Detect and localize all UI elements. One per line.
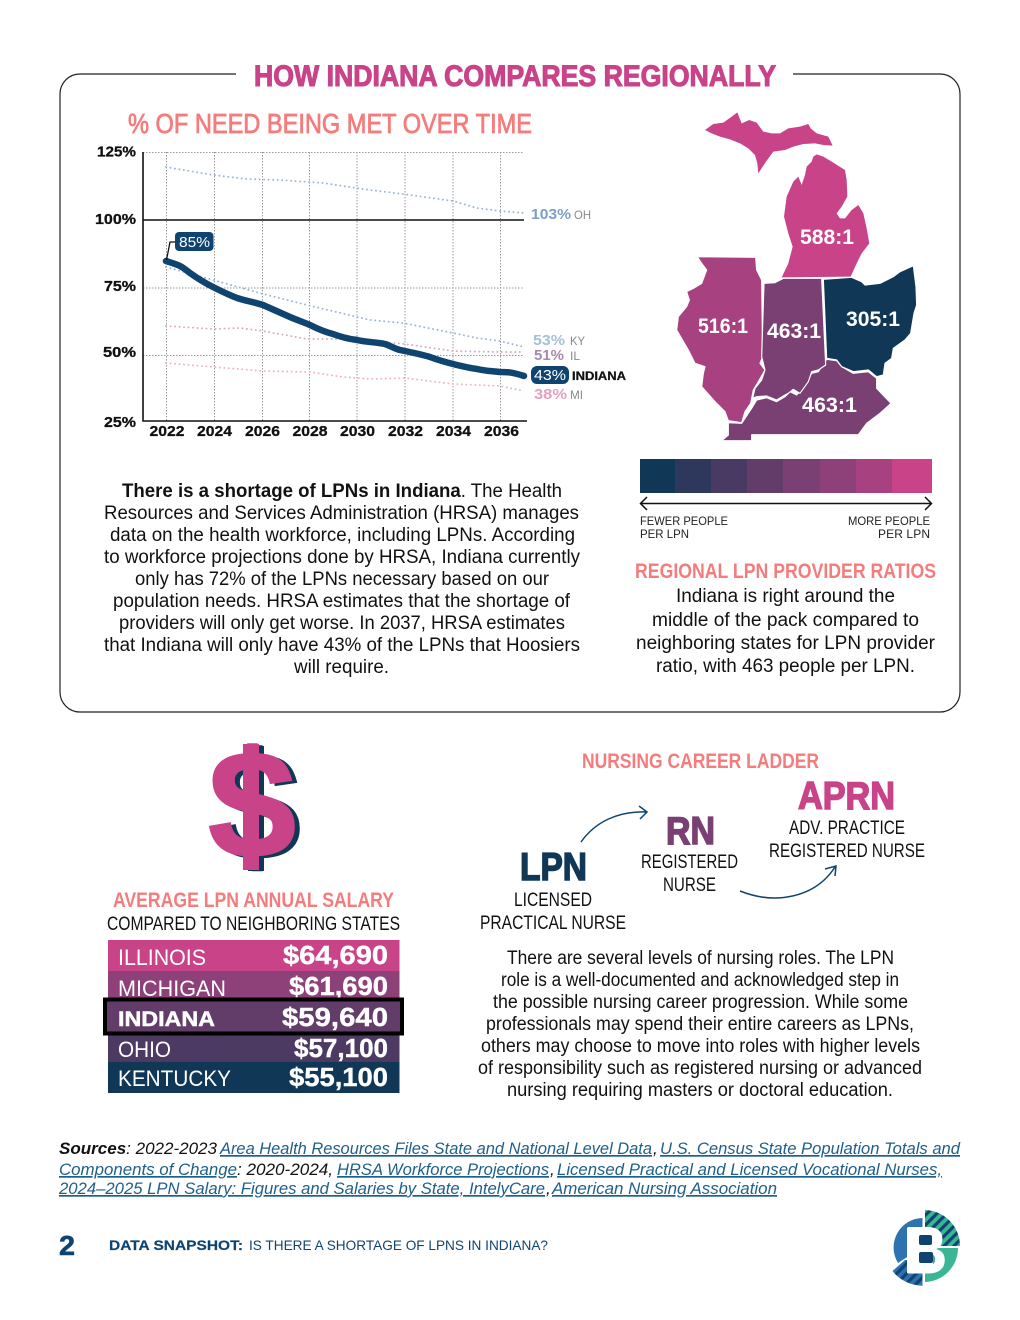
label: Indiana 43 percent: 43%: [534, 368, 566, 384]
y axis labels: 125%: [97, 144, 136, 160]
label: Kentucky 53 percent: KY: [570, 334, 585, 348]
value: Indiana ratio: 463:1: [767, 320, 821, 343]
sources: ,: [653, 1139, 658, 1158]
career step: LPN: PRACTICAL NURSE: [480, 913, 626, 934]
state: Kentucky: [722, 359, 891, 441]
row: Michigan: MICHIGAN: [118, 976, 226, 1001]
text block: LPN shortage explanation: population needs. HRSA estimates that the shortage of: [113, 591, 571, 612]
text block: LPN shortage explanation: that Indiana will only have 43% of the LPNs that Hoosiers: [104, 635, 580, 656]
career step: RN: RN: [666, 810, 715, 853]
x axis labels: 2022: [150, 423, 184, 440]
x axis labels: 2034: [436, 423, 472, 440]
text block: nursing roles: others may choose to move into roles with higher levels: [481, 1036, 920, 1057]
callout: 85 percent: 85%: [179, 235, 210, 251]
sources: U.S. Census State Population Totals and: [660, 1139, 961, 1158]
text block: regional ratios: ratio, with 463 people per LPN.: [656, 656, 915, 677]
career step: LPN: LPN: [520, 846, 587, 889]
row: Illinois: $64,690: [283, 940, 388, 970]
footer title: IS THERE A SHORTAGE OF LPNS IN INDIANA?: [249, 1237, 548, 1253]
sources: [58, 1139, 961, 1198]
series: Kentucky: [166, 267, 524, 347]
label: Ohio 103 percent: [531, 206, 591, 223]
state: Indiana: [753, 278, 826, 400]
career step: APRN: [769, 775, 925, 862]
y axis labels: 100%: [95, 211, 136, 228]
text block: LPN shortage explanation: [104, 481, 580, 678]
row: Kentucky: KENTUCKY: [118, 1066, 231, 1091]
label: Kentucky 53 percent: 53%: [533, 332, 565, 349]
label: Kentucky 53 percent: [533, 332, 585, 349]
logo: [892, 1210, 960, 1287]
y axis labels: 50%: [103, 344, 136, 361]
footer title: DATA SNAPSHOT:: [109, 1237, 243, 1253]
row: Kentucky: $55,100: [289, 1062, 388, 1092]
heading: nursing career ladder: NURSING CAREER LADDER: [582, 750, 819, 773]
series: Illinois: [166, 326, 524, 352]
legend label: fewer people: PER LPN: [640, 527, 689, 541]
legend label: fewer people: [640, 514, 728, 541]
row: Michigan: [108, 971, 400, 1001]
y axis labels: 75%: [104, 278, 136, 295]
series: Ohio: [166, 167, 524, 213]
arrow: RN to APRN: [740, 866, 836, 898]
sources: Components of Change: [59, 1160, 237, 1179]
x axis labels: 2032: [388, 423, 423, 440]
text block: LPN shortage explanation: There is a shortage of LPNs in Indiana. The Health: [122, 481, 562, 502]
career step: APRN: REGISTERED NURSE: [769, 841, 925, 862]
sources: ,: [546, 1179, 551, 1198]
y axis labels: 25%: [104, 414, 136, 431]
label: Michigan 38 percent: [534, 386, 583, 403]
table: salaries by state: [105, 940, 402, 1093]
career step: APRN: APRN: [798, 775, 895, 818]
label: Ohio 103 percent: 103%: [531, 206, 571, 223]
legend label: fewer people: FEWER PEOPLE: [640, 514, 728, 528]
row: Ohio: $57,100: [294, 1033, 388, 1063]
label: Michigan 38 percent: MI: [570, 388, 583, 402]
sources: 2024–2025 LPN Salary: Figures and Salaries by State, IntelyCare: [58, 1179, 545, 1198]
sources: : 2020-2024,: [237, 1160, 333, 1179]
x axis labels: 2026: [245, 423, 280, 440]
title: HOW INDIANA COMPARES REGIONALLY: [254, 60, 776, 93]
value: Ohio ratio: 305:1: [846, 308, 900, 331]
text block: regional ratios: neighboring states for LPN provider: [636, 633, 936, 654]
row: Indiana highlighted: [105, 1000, 402, 1034]
text block: LPN shortage explanation: will require.: [293, 657, 389, 678]
career step: RN: NURSE: [663, 875, 716, 896]
career step: RN: [641, 810, 738, 896]
career step: LPN: [480, 846, 626, 934]
row: Indiana highlighted: INDIANA: [118, 1008, 215, 1031]
x axis labels: [150, 423, 519, 440]
value: Michigan ratio: 588:1: [800, 226, 854, 249]
x axis labels: 2030: [340, 423, 375, 440]
callout: 85 percent: [166, 232, 214, 260]
sources: Licensed Practical and Licensed Vocational Nurses,: [557, 1160, 942, 1179]
line chart: percent of need over time: [95, 144, 626, 440]
arrow: scale direction: [640, 497, 932, 510]
row: Indiana highlighted: $59,640: [282, 1002, 388, 1032]
heading: average LPN annual salary: AVERAGE LPN ANNUAL SALARY: [113, 889, 394, 912]
career step: APRN: ADV. PRACTICE: [789, 818, 905, 839]
label: Illinois 51 percent: IL: [570, 349, 580, 363]
text block: nursing roles: nursing requiring masters or doctoral education.: [507, 1080, 893, 1101]
legend label: more people: [848, 514, 930, 541]
label: Ohio 103 percent: OH: [574, 208, 591, 222]
row: Ohio: OHIO: [118, 1037, 171, 1062]
label: Indiana 43 percent: [531, 366, 626, 384]
legend: colour scale: [640, 459, 932, 541]
text block: LPN shortage explanation: providers will only get worse. In 2037, HRSA estimates: [119, 613, 565, 634]
row: Michigan: $61,690: [289, 971, 388, 1001]
logo: B: [904, 1213, 947, 1287]
text block: LPN shortage explanation: only has 72% of the LPNs necessary based on our: [135, 569, 550, 590]
map: regional LPN provider ratios: [677, 112, 917, 441]
value: Kentucky ratio: 463:1: [802, 394, 857, 417]
career step: RN: REGISTERED: [641, 852, 738, 873]
text block: nursing roles: [478, 948, 922, 1101]
label: Illinois 51 percent: [534, 347, 580, 364]
icon: dollar sign: $: [213, 722, 301, 892]
row: Ohio: [108, 1032, 400, 1063]
heading: percent of need being met: % OF NEED BEING MET OVER TIME: [128, 108, 532, 139]
series: Indiana: [166, 261, 524, 376]
state: Ohio: [823, 266, 917, 377]
x axis labels: 2024: [197, 423, 233, 440]
arrow: LPN to RN: [581, 806, 647, 842]
sources: American Nursing Association: [551, 1179, 777, 1198]
footer title: [109, 1237, 548, 1253]
career step: LPN: LICENSED: [514, 890, 592, 911]
sources: Area Health Resources Files State and National Level Data: [219, 1139, 652, 1158]
text block: nursing roles: the possible nursing career progression. While some: [493, 992, 908, 1013]
text block: LPN shortage explanation: data on the health workforce, including LPNs. According: [110, 525, 575, 546]
subheading: compared to neighboring states: COMPARED TO NEIGHBORING STATES: [107, 914, 400, 935]
legend label: more people: PER LPN: [878, 527, 930, 541]
row: Illinois: ILLINOIS: [118, 945, 206, 970]
text block: LPN shortage explanation: Resources and Services Administration (HRSA) manages: [104, 503, 579, 524]
text block: nursing roles: of responsibility such as registered nursing or advanced: [478, 1058, 922, 1079]
text block: LPN shortage explanation: to workforce projections done by HRSA, Indiana currently: [104, 547, 580, 568]
label: Michigan 38 percent: 38%: [534, 386, 567, 403]
label: Indiana 43 percent: INDIANA: [572, 371, 626, 383]
value: Illinois ratio: 516:1: [698, 315, 748, 338]
heading: regional LPN provider ratios: REGIONAL LPN PROVIDER RATIOS: [635, 560, 936, 583]
text block: nursing roles: role is a well-documented and acknowledged step in: [501, 970, 899, 991]
text block: nursing roles: There are several levels of nursing roles. The LPN: [507, 948, 894, 969]
page number: 2: [59, 1230, 75, 1261]
x axis labels: 2036: [484, 423, 519, 440]
x axis labels: 2028: [292, 423, 328, 440]
text block: regional ratios: Indiana is right around the: [676, 586, 895, 607]
icon: dollar sign: $: [208, 720, 296, 890]
state: Illinois: [677, 257, 765, 423]
y axis labels: [95, 144, 136, 431]
sources: HRSA Workforce Projections: [337, 1160, 549, 1179]
legend label: more people: MORE PEOPLE: [848, 514, 930, 528]
sources: Sources: 2022-2023: [59, 1139, 218, 1158]
sources: ,: [550, 1160, 555, 1179]
series: Michigan: [166, 363, 524, 391]
state: Michigan: [705, 112, 869, 277]
row: Illinois: [108, 940, 400, 971]
text block: regional ratios: [636, 586, 936, 677]
row: Kentucky: [108, 1062, 400, 1093]
text block: regional ratios: middle of the pack compared to: [652, 610, 919, 631]
text block: nursing roles: professionals may spend their entire careers as LPNs,: [486, 1014, 914, 1035]
label: Illinois 51 percent: 51%: [534, 347, 564, 364]
